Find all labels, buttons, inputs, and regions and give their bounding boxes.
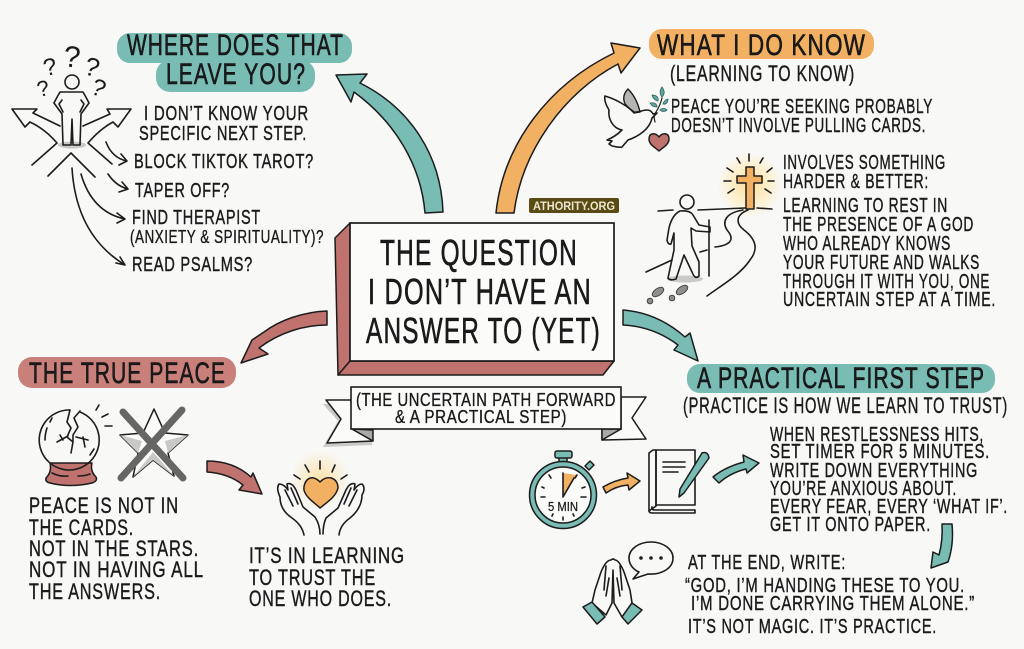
text: when restlessness hits: [770, 424, 1008, 536]
text: closing prayer: IT’S NOT MAGIC. IT’S PRACTICE.: [688, 616, 937, 638]
icon: confused person at crossroads: ?: [62, 40, 82, 75]
arrow: notebook to text: [713, 455, 759, 483]
panel: a practical first step: [530, 362, 1008, 638]
icon: notebook and pen: [649, 450, 709, 513]
icon: dove with olive branch and heart: [605, 87, 669, 151]
ribbon banner subtitle: [323, 387, 646, 447]
icon: five minute stopwatch: [530, 451, 596, 528]
text: learning to trust: IT’S IN LEARNING: [249, 543, 405, 568]
icon: crossed out star: [120, 409, 188, 478]
heading: where does that leave you: [117, 29, 352, 92]
arrow: timer to notebook: [603, 473, 640, 493]
heading: the true peace: THE TRUE PEACE: [29, 357, 226, 390]
central question box: THE QUESTION: [380, 232, 578, 273]
text: specific next step: SPECIFIC NEXT STEP.: [139, 123, 307, 145]
text: learning to trust: TO TRUST THE: [249, 565, 376, 590]
text: peace is not in the cards: THE ANSWERS.: [29, 579, 161, 604]
text: peace is not in the cards: NOT IN THE STARS.: [29, 536, 199, 561]
arrow: down to closing prayer: [931, 524, 952, 568]
central question box: I DON’T HAVE AN: [368, 271, 592, 312]
text: when restlessness hits: GET IT ONTO PAPER.: [770, 514, 931, 536]
text: peace you're seeking: [671, 96, 933, 137]
heading: what i do know: (LEARNING TO KNOW): [670, 61, 855, 86]
icon: confused person at crossroads: ?: [35, 75, 52, 102]
ribbon banner subtitle: (THE UNCERTAIN PATH FORWARD: [356, 390, 616, 410]
text: peace is not in the cards: [29, 493, 204, 604]
heading: what i do know: [649, 29, 874, 86]
list: possible next steps: READ PSALMS?: [132, 254, 253, 276]
list: possible next steps: (ANXIETY & SPIRITUALITY)?: [130, 227, 324, 247]
icon: confused person at crossroads: ?: [41, 53, 59, 82]
icon: hands holding heart: [278, 450, 364, 535]
arrow: to what i do know: [496, 43, 640, 213]
ribbon banner subtitle: & A PRACTICAL STEP): [395, 407, 567, 427]
text: peace is not in the cards: THE CARDS.: [29, 515, 134, 540]
heading: where does that leave you: LEAVE YOU?: [166, 58, 306, 91]
arrow: to a practical first step: [623, 310, 698, 361]
panel: what i do know: [605, 29, 996, 311]
text: involves something harder: HARDER & BETTER:: [783, 171, 929, 193]
heading: a practical first step: [683, 362, 1008, 418]
icon: cracked crystal ball: [39, 405, 112, 486]
list: possible next steps: [130, 151, 324, 276]
text: closing prayer: AT THE END, WRITE:: [688, 552, 846, 574]
central question box: ANSWER TO (YET): [366, 310, 601, 351]
heading: where does that leave you: WHERE DOES THAT: [127, 29, 344, 62]
heading: what i do know: WHAT I DO KNOW: [657, 29, 866, 62]
text: peace is not in the cards: PEACE IS NOT IN: [29, 493, 179, 518]
text: specific next step: I DON’T KNOW YOUR: [144, 103, 309, 125]
central question box: [335, 223, 614, 375]
text: closing prayer: [685, 552, 975, 638]
arrow: to trust: [207, 461, 262, 494]
text: involves something harder: LEARNING TO REST IN: [783, 195, 948, 217]
watermark tag: ATHORITY.ORG: [533, 201, 615, 213]
text: involves something harder: INVOLVES SOMETHING: [783, 152, 946, 174]
icon: five minute stopwatch: 5 MIN: [548, 500, 578, 514]
arrows: options branches: [72, 142, 128, 265]
icon: confused person at crossroads: [12, 40, 131, 177]
panel: the true peace: [18, 357, 405, 611]
text: learning to trust: ONE WHO DOES.: [249, 586, 392, 611]
text: learning to trust: [249, 543, 405, 611]
list: possible next steps: FIND THERAPIST: [132, 207, 261, 229]
icon: confused person at crossroads: ?: [87, 73, 110, 103]
arrow: to where does that leave you: [336, 74, 443, 213]
panel: where does that leave you: [12, 29, 352, 276]
text: peace is not in the cards: NOT IN HAVING ALL: [29, 557, 204, 582]
arrow: to the true peace: [241, 311, 327, 363]
icon: hiker walking towards glowing cross: [646, 152, 783, 304]
text: involves something harder: WHO ALREADY KNOWS: [783, 233, 951, 255]
list: possible next steps: TAPER OFF?: [135, 180, 230, 202]
icon: confused person at crossroads: ?: [81, 51, 103, 83]
text: involves something harder: [783, 152, 996, 311]
text: specific next step: [139, 103, 309, 145]
list: possible next steps: BLOCK TIKTOK TAROT?: [134, 151, 314, 173]
icon: praying hands with speech bubble: [583, 542, 673, 624]
